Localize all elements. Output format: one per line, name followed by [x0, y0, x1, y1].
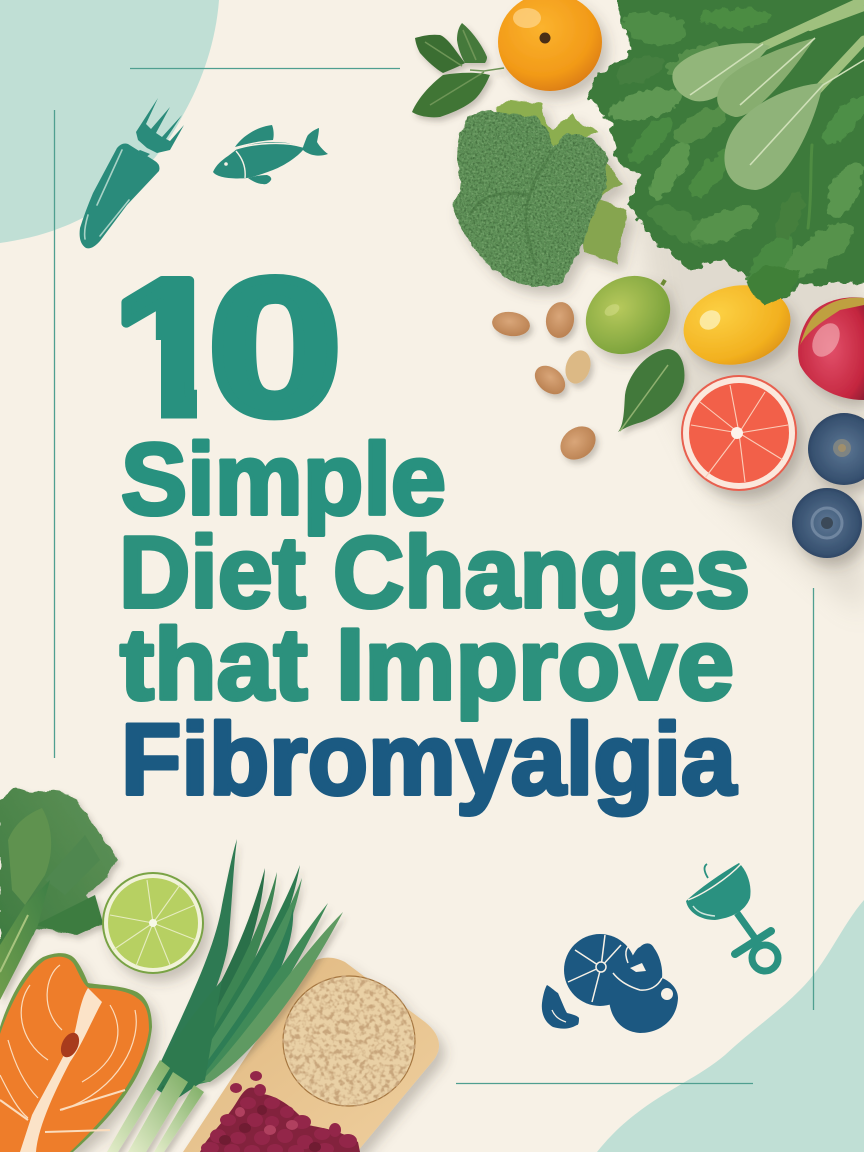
title number 10 — [121, 274, 338, 420]
almonds — [491, 300, 602, 467]
spoon leaf A — [672, 43, 770, 101]
red beans — [200, 1071, 360, 1152]
title line: Fibromyalgia: Fibromyalgia — [121, 704, 737, 816]
blob: bottom right — [597, 900, 864, 1152]
blob: top left — [0, 0, 219, 243]
orange — [498, 0, 602, 91]
green onions — [107, 839, 343, 1152]
spoon leaf C — [724, 83, 823, 190]
spoon leaf stems — [760, 0, 864, 228]
leafy greens — [587, 0, 864, 305]
shadow behind fruit — [625, 130, 864, 615]
lime whole — [571, 260, 685, 370]
icon: goblet rattle — [686, 863, 778, 971]
icon: carrot fork — [80, 98, 184, 248]
leafy greens: bottom left — [0, 788, 117, 1000]
lime slice — [103, 873, 203, 973]
title line: Diet Changes: Diet Changes — [119, 517, 750, 629]
title — [112, 239, 750, 816]
title number 10: 0 — [208, 239, 342, 456]
title number 10: 1 — [112, 239, 228, 456]
spinach leaf — [618, 349, 684, 432]
title line: Simple: Simple — [121, 424, 446, 536]
icon: fish — [213, 125, 328, 184]
wooden board — [183, 958, 439, 1152]
salmon — [0, 953, 152, 1152]
green leaf over lemon — [745, 265, 800, 305]
grapefruit — [681, 375, 797, 491]
broccoli — [452, 100, 627, 287]
frame lines — [54, 68, 814, 1084]
grain bowl — [283, 976, 415, 1106]
onion blades — [150, 839, 237, 1095]
icon: navy food group — [542, 934, 678, 1033]
apple — [798, 297, 864, 400]
onion stems — [107, 1060, 170, 1152]
blueberries — [792, 413, 864, 558]
herb leaves — [412, 23, 504, 117]
title line: that Improve: that Improve — [120, 609, 734, 721]
lemon yellow — [676, 276, 798, 374]
spoon leaf B — [717, 38, 815, 117]
